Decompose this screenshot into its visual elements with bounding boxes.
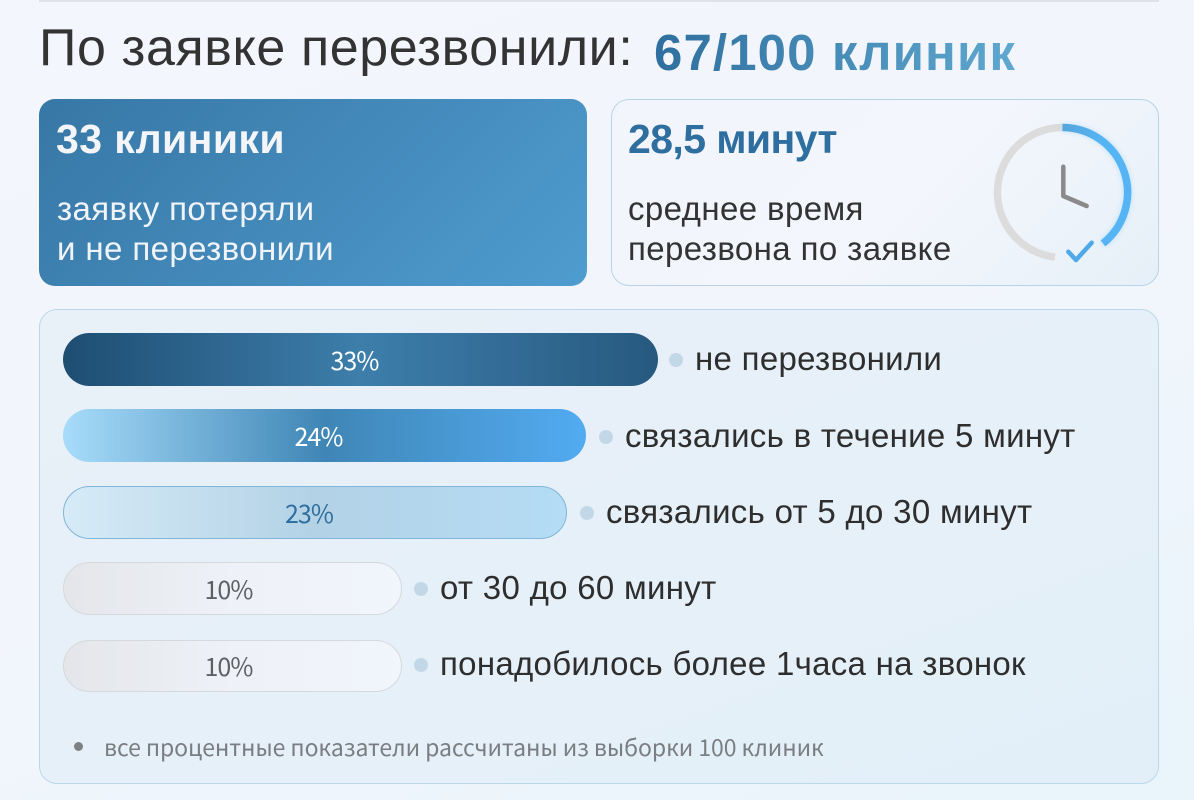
- icon: clock: [994, 122, 1134, 262]
- panel: 33 clinics: [39, 99, 587, 286]
- footnote: все процентные показатели рассчитаны из выборки 100 клиник: [104, 729, 824, 763]
- bar: 10%: [63, 562, 402, 615]
- bar: 10% second: 10%: [204, 648, 253, 684]
- label: 5 to 30 minutes: связались от 5 до 30 минут: [606, 493, 1032, 530]
- panel: average time: [611, 99, 1159, 286]
- text: lost request: и не перезвонили: [57, 230, 334, 267]
- bar: 24%: 24%: [294, 418, 343, 454]
- label: within 5 minutes: связались в течение 5 минут: [625, 417, 1076, 454]
- bar: 10% second: [63, 640, 402, 692]
- text: lost request: [57, 190, 334, 267]
- label: 30 to 60 minutes: от 30 до 60 минут: [440, 569, 716, 606]
- text: average callback time: перезвона по заявке: [628, 230, 952, 267]
- top divider: [39, 0, 1159, 2]
- bar: 33%: [63, 333, 658, 386]
- bar: 23%: [63, 486, 567, 539]
- clock hands: [1063, 167, 1087, 206]
- clock grey ring: [997, 127, 1062, 257]
- heading: 33 clinics: 33 клиники: [56, 116, 285, 162]
- bar: 23%: 23%: [285, 495, 333, 531]
- bar: 24%: [63, 409, 586, 462]
- label: over an hour: понадобилось более 1часа на звонок: [440, 645, 1026, 682]
- clock check mark: [1068, 243, 1092, 260]
- text: average callback time: [628, 190, 952, 267]
- bar: 33%: 33%: [330, 342, 379, 378]
- clock blue glow: [1062, 127, 1128, 243]
- title: highlighted number: 67/100 клиник: [654, 24, 1016, 81]
- title: lead text: По заявке перезвонили:: [39, 19, 633, 77]
- clock blue progress arc: [1062, 127, 1128, 243]
- heading: 28.5 minutes: 28,5 минут: [628, 116, 837, 162]
- text: average callback time: среднее время: [628, 190, 864, 227]
- bar: 10%: 10%: [204, 571, 253, 607]
- text: lost request: заявку потеряли: [57, 190, 314, 227]
- label: no callback: не перезвонили: [695, 340, 942, 377]
- panel: distribution chart: [39, 309, 1159, 784]
